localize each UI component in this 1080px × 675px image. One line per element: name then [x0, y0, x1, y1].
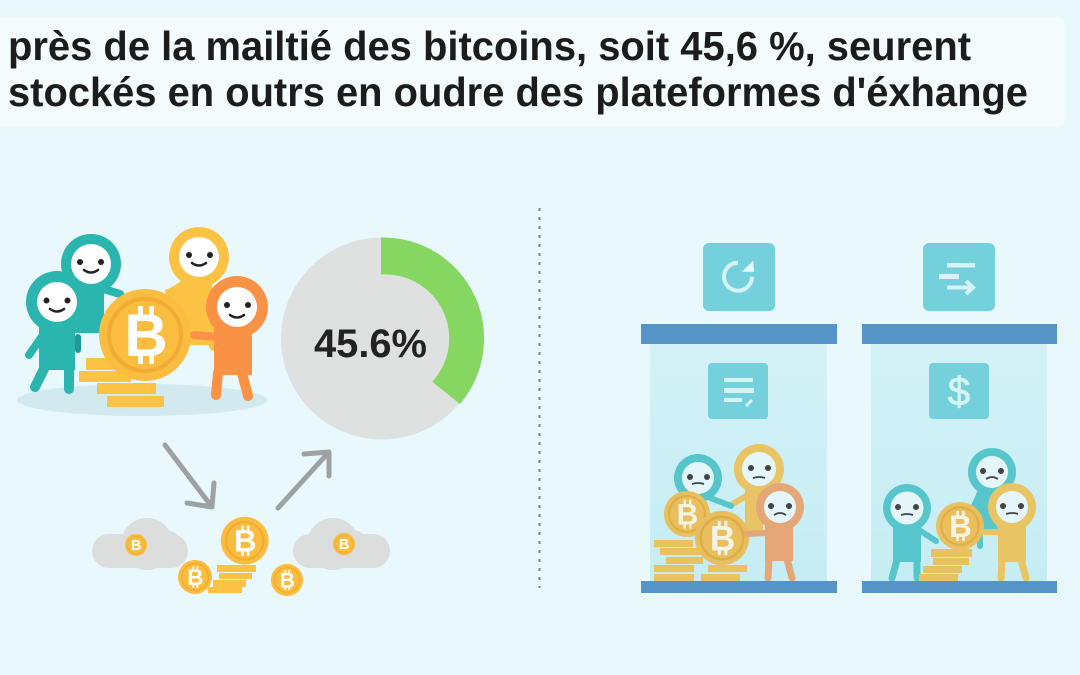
glass column — [650, 344, 827, 581]
panel: left illustration — [17, 227, 484, 596]
column top bar — [862, 324, 1057, 344]
icon: coin lower: B — [710, 518, 735, 558]
icon: refresh tile — [703, 243, 775, 311]
person: teal sad — [674, 454, 731, 506]
icon: lower right coin: B — [280, 569, 295, 592]
icon: coin: B — [949, 509, 972, 544]
person: orange sad — [746, 483, 804, 578]
icon: lower left coin — [178, 560, 212, 594]
glass column — [871, 344, 1047, 581]
small coin stack — [208, 565, 256, 593]
coin stack — [919, 549, 972, 581]
icon: coin — [936, 502, 984, 550]
icon: coin upper — [664, 491, 710, 537]
icon: large bitcoin coin — [99, 289, 191, 381]
person: yellow sad — [984, 483, 1036, 578]
person: yellow happy — [165, 227, 229, 347]
coin stack — [79, 358, 164, 407]
coin stacks — [654, 540, 747, 581]
icon: coin on stack — [221, 517, 269, 565]
person: orange happy — [194, 276, 268, 396]
person: teal sad back — [968, 448, 1016, 546]
icon: right cloud — [293, 518, 390, 570]
icon: cloud coin left: B — [131, 538, 141, 554]
title line 2: stockés en outrs en oudre des plateformes d'éxhange — [8, 69, 1028, 115]
chart value: 45.6% — [314, 322, 427, 366]
icon: left cloud — [92, 518, 188, 570]
icon: cloud coin left — [125, 534, 147, 556]
arrow: up right — [278, 452, 329, 508]
panel: exchange column 2 — [862, 243, 1057, 593]
icon: dollar tile: $ — [948, 370, 970, 414]
title line 1: près de la mailtié des bitcoins, soit 45,6 %, seurent — [8, 23, 971, 69]
person: teal sad front — [883, 484, 936, 578]
icon: transfer tile — [923, 243, 995, 311]
column bottom bar — [641, 581, 837, 593]
icon: coin upper: B — [677, 498, 698, 532]
donut chart 45.6% — [281, 237, 484, 440]
person: yellow sad — [731, 444, 784, 533]
icon: lower left coin: B — [187, 565, 203, 590]
icon: document tile — [708, 363, 768, 419]
icon: lower right coin — [271, 564, 303, 596]
title panel — [0, 17, 1065, 127]
icon: coin lower — [695, 511, 749, 565]
icon: cloud coin right — [333, 533, 355, 555]
icon: large bitcoin coin: B — [124, 302, 168, 369]
column bottom bar — [862, 581, 1057, 593]
ground shadow — [17, 384, 267, 416]
icon: dollar tile — [929, 363, 989, 419]
person: teal back happy — [60, 234, 121, 350]
panel: exchange column 1 — [641, 243, 837, 593]
icon: coin on stack: B — [234, 524, 256, 559]
person: teal front happy — [26, 271, 88, 389]
arrow: down right — [165, 445, 214, 507]
column top bar — [641, 324, 837, 344]
icon: cloud coin right: B — [339, 537, 349, 553]
